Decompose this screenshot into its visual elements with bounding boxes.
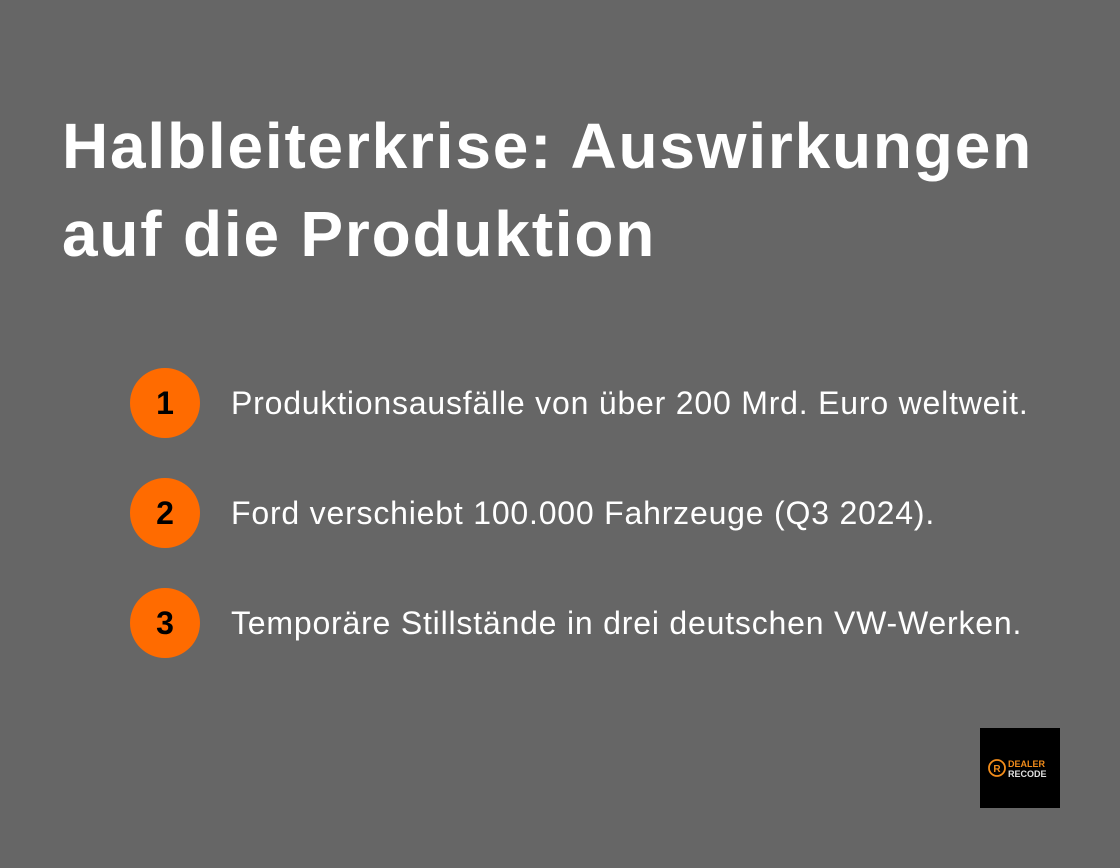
icon: number 3	[130, 588, 200, 658]
text 3: Temporäre Stillstände in drei deutschen VW-Werken.	[231, 605, 1022, 641]
item 1	[130, 368, 1029, 438]
text 1: Produktionsausfälle von über 200 Mrd. Euro weltweit.	[231, 385, 1029, 421]
icon: number 1	[130, 368, 200, 438]
logo: R	[993, 764, 1001, 775]
title	[62, 110, 1033, 270]
title: Halbleiterkrise: Auswirkungen	[62, 110, 1033, 182]
logo	[980, 728, 1060, 808]
logo: DEALER	[1008, 759, 1046, 769]
item 3	[130, 588, 1022, 658]
text 2: Ford verschiebt 100.000 Fahrzeuge (Q3 2024).	[231, 495, 935, 531]
icon: number 3: 3	[156, 605, 174, 641]
icon: number 1: 1	[156, 385, 174, 421]
icon: number 2: 2	[156, 495, 174, 531]
logo: RECODE	[1008, 769, 1047, 779]
icon: number 2	[130, 478, 200, 548]
title: auf die Produktion	[62, 198, 656, 270]
item 2	[130, 478, 935, 548]
